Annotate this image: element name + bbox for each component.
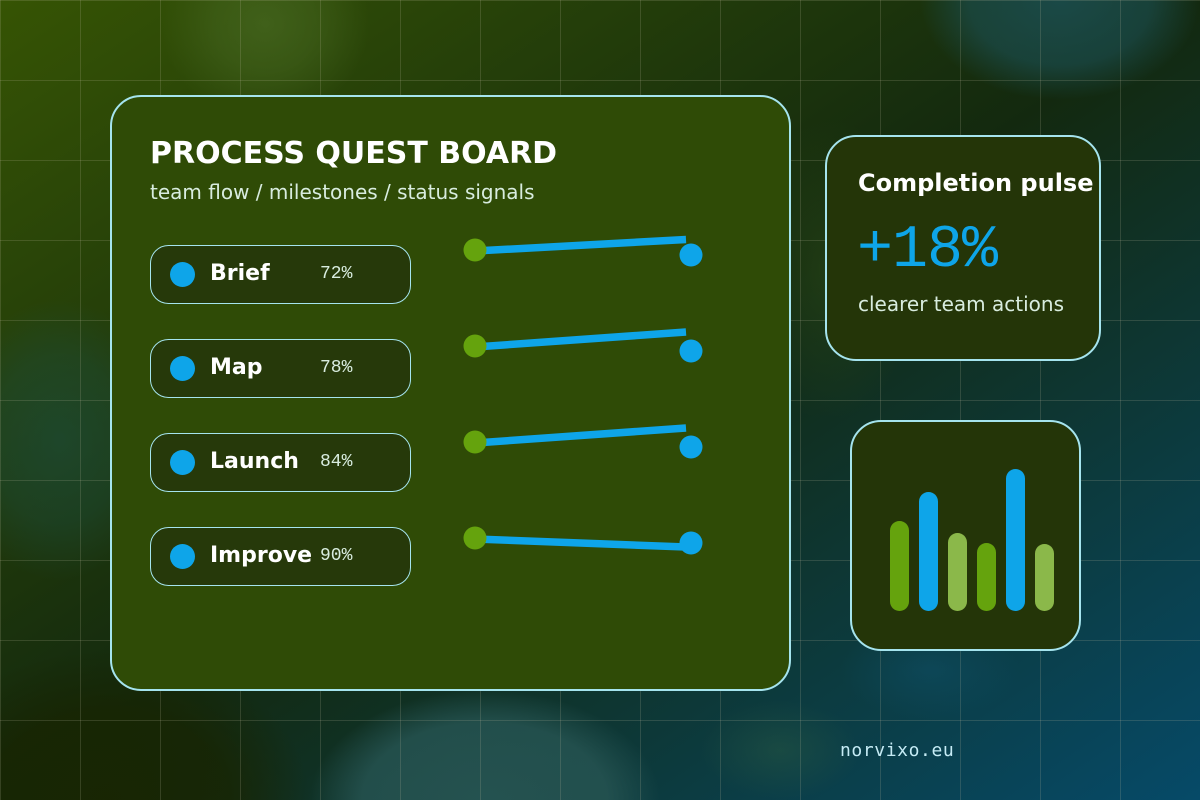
step: Launch: 84% — [320, 452, 353, 472]
step: Launch — [150, 434, 410, 492]
panel: process quest board — [111, 96, 790, 690]
bar chart — [890, 469, 1054, 611]
step: Improve: 90% — [320, 546, 353, 566]
title: PROCESS QUEST BOARD — [150, 136, 557, 171]
connector: Brief — [464, 238, 702, 266]
step: Launch: Launch — [210, 449, 299, 474]
step: Brief: Brief — [210, 261, 270, 286]
step: Map: Map — [210, 355, 262, 380]
step: Brief — [150, 246, 410, 304]
step: Brief: 72% — [320, 264, 353, 284]
caption: clearer team actions — [858, 292, 1064, 316]
step: Improve — [150, 528, 410, 586]
brand footer: norvixo.eu — [840, 740, 954, 761]
heading: completion pulse: Completion pulse — [858, 169, 1093, 197]
step: Map: 78% — [320, 358, 353, 378]
connector: Map — [464, 332, 702, 362]
panel: completion pulse — [826, 136, 1100, 360]
panel: bar chart — [851, 421, 1080, 650]
step: Map — [150, 340, 410, 398]
subtitle: team flow / milestones / status signals — [150, 180, 535, 204]
connector: Improve — [464, 526, 702, 554]
step: Improve: Improve — [210, 543, 312, 568]
metric: +18%: +18% — [857, 217, 999, 285]
main panel background — [111, 96, 790, 690]
connector: Launch — [464, 428, 702, 458]
